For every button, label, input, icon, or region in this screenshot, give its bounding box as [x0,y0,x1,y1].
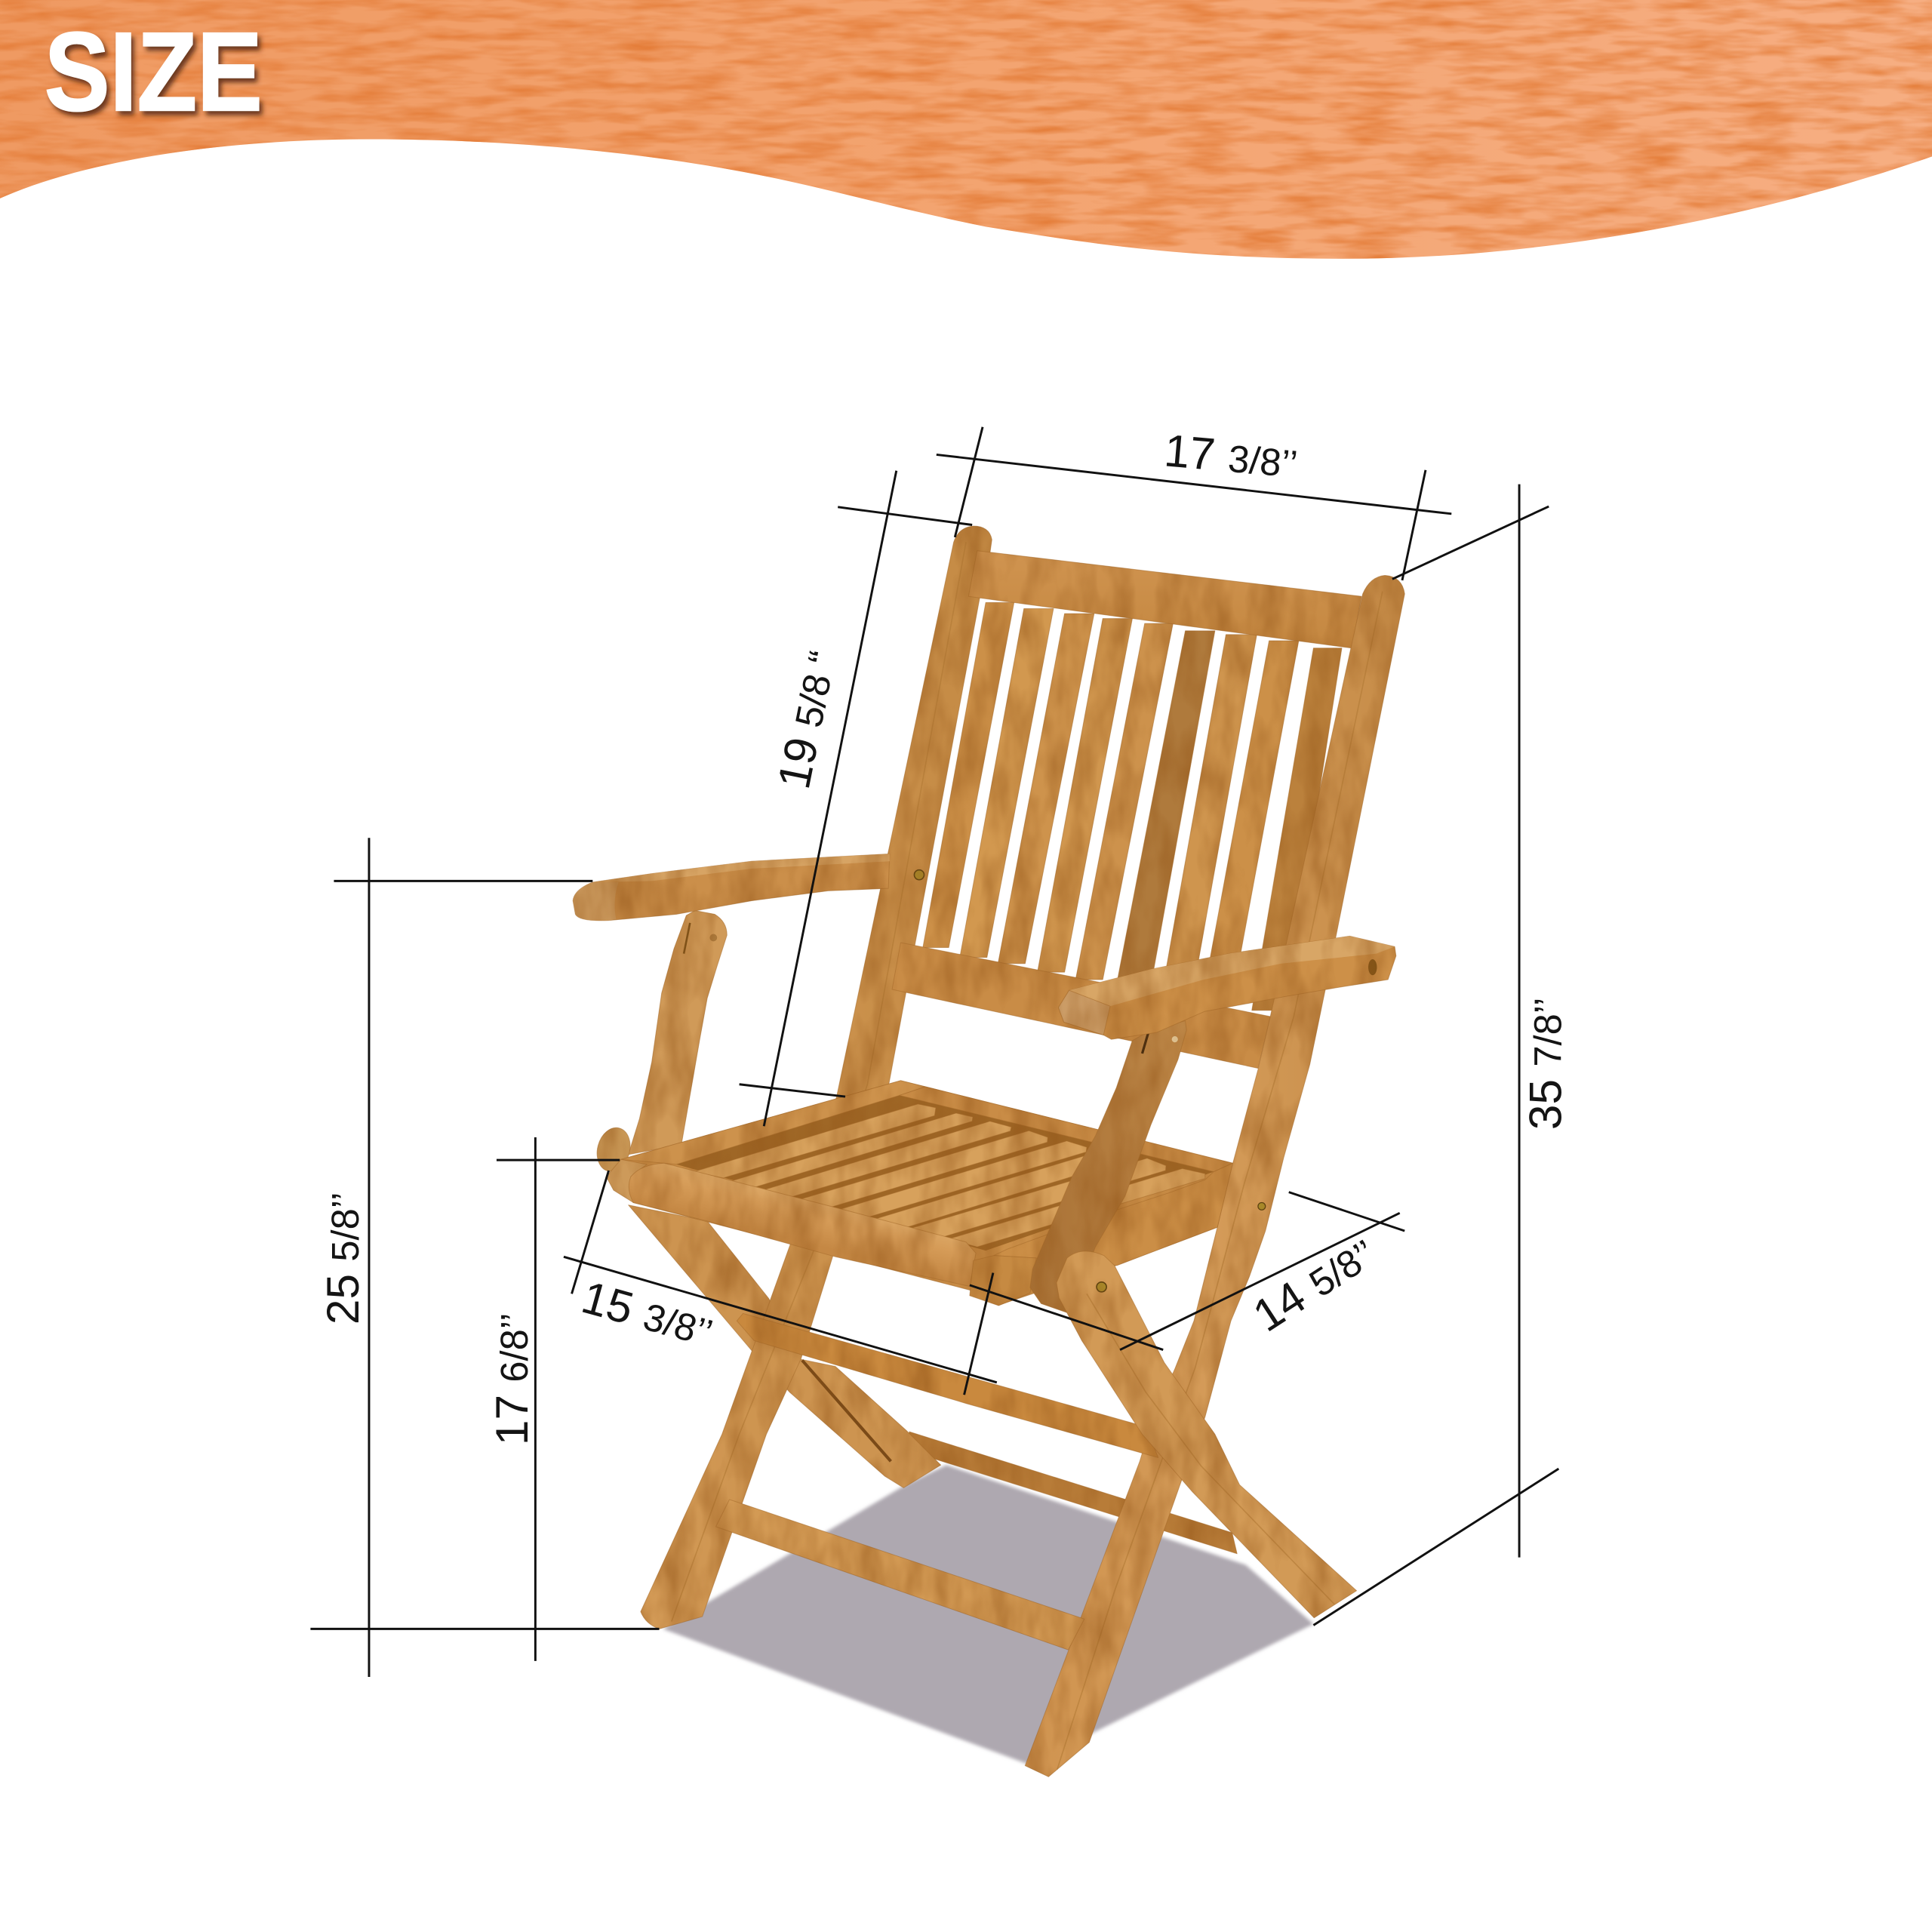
rear lower crossbar [907,1432,1237,1554]
bolt left post [914,870,924,880]
arm top face [1069,936,1395,1006]
dimension: seat height 17 6/8: 176/8’’ [486,1313,537,1445]
support hole [709,934,717,941]
seat left corner block [606,1159,647,1202]
support slot [1142,1032,1149,1054]
seat left rail [621,1081,925,1164]
seat rear rail [900,1087,1232,1172]
back slats [923,602,1342,1011]
header: wood texture wave banner [0,0,1932,259]
left leg crease [672,542,966,1622]
chair illustration [573,526,1404,1777]
dimension: back width 17 3/8: 17 3/8’’ [1162,424,1300,488]
front X leg [1057,1251,1357,1618]
right post crease [1057,592,1383,1769]
front bolt [1097,1282,1106,1292]
support hole [1172,1036,1178,1042]
dimension: arm height 25 5/8: 255/8’’ [317,1192,368,1324]
right post and leg [1025,575,1404,1777]
dimension: back width 17 3/8 [937,424,1451,580]
dimension: total height 35 7/8: 357/8’’ [1520,998,1571,1130]
back lower rail [892,943,1270,1069]
middle crossbar [737,1313,1158,1457]
left post and leg [641,526,992,1629]
back top rail [968,551,1361,648]
seat right side rail [994,1163,1232,1266]
left arm [573,854,890,921]
dimension: seat depth 14 5/8: 145/8’’ [1244,1226,1384,1341]
right arm [1058,936,1396,1039]
X leg crease [1087,1294,1334,1604]
left seat knob [592,1124,635,1175]
left arm top face [592,854,890,882]
dimension: back height 19 5/8 [740,471,972,1126]
lower front crossbar [716,1500,1084,1650]
seat [606,1081,1232,1306]
arm hole [1368,959,1377,975]
dimension: seat width 15 3/8: 153/8’’ [577,1271,719,1356]
right arm support [1030,1020,1186,1313]
slot in rear leg [802,1360,891,1461]
bolt right post [1258,1202,1266,1210]
title: SIZE: SIZE [45,10,263,134]
floor shadow [663,1465,1313,1764]
dimension: seat width 15 3/8 [564,1171,997,1395]
dimension: seat depth 14 5/8 [970,1192,1404,1350]
seat inner gap [676,1095,1214,1251]
dimension: total height 35 7/8 [1313,485,1571,1625]
left arm end face [573,882,619,921]
seat base frame [621,1081,1232,1305]
dimension: back height 19 5/8: 195/8 “ [768,646,845,793]
arm end face [1058,990,1110,1035]
seat front rail [629,1163,976,1286]
seat front end block [970,1256,1036,1306]
seat slats [694,1104,1205,1247]
left arm support [629,911,727,1155]
support slot [684,923,690,954]
rear X leg [629,1205,941,1487]
